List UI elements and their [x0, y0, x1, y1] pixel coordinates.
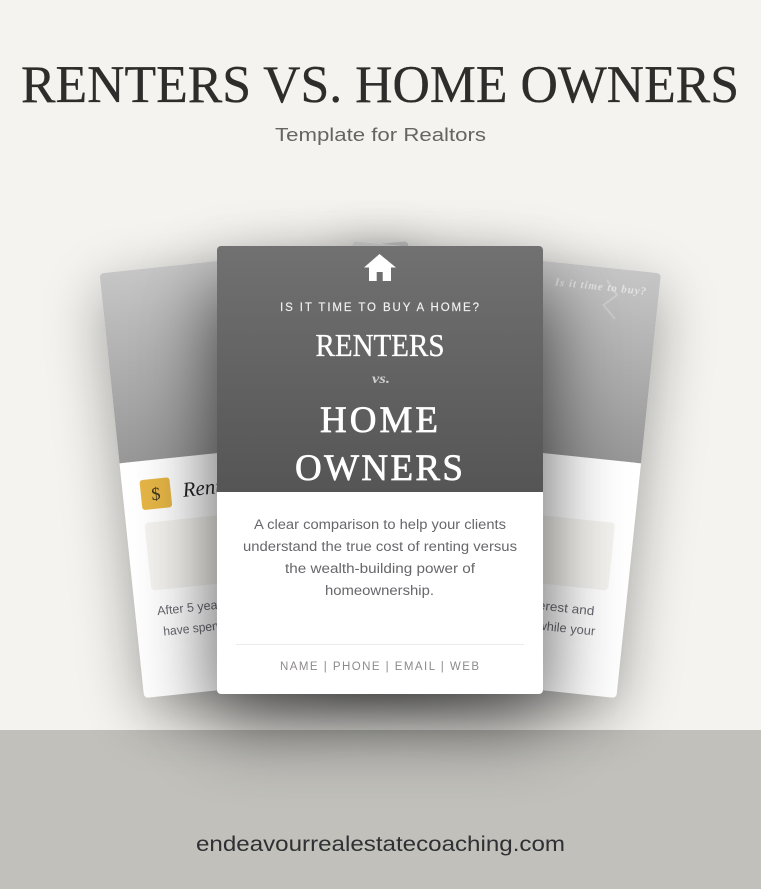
- contact line: NAME | PHONE | EMAIL | WEB: [280, 661, 479, 673]
- description text: A clear comparison to help your clients: [254, 517, 506, 532]
- center card header: [217, 246, 543, 492]
- left card heading: Renters: [180, 471, 248, 502]
- subtitle: Template for Realtors: [275, 124, 486, 145]
- right card header caption: Is it time to buy?: [553, 276, 647, 298]
- icon: dollar badge: $: [150, 483, 161, 504]
- right card text: while your: [536, 618, 596, 638]
- left card text: After 5 years: [156, 597, 229, 618]
- kicker: IS IT TIME TO BUY A HOME?: [280, 302, 479, 314]
- panel: right tilted card: [306, 241, 661, 716]
- heading: home: HOME: [320, 400, 438, 441]
- description text: the wealth-building power of: [285, 561, 475, 576]
- panel: center card: [217, 246, 543, 694]
- icon: dollar badge: [139, 477, 172, 510]
- heading: owners: OWNERS: [295, 448, 463, 489]
- panel: left tilted card: [100, 241, 454, 716]
- right card text: [521, 597, 598, 638]
- footer url: endeavourrealestatecoaching.com: [196, 832, 565, 856]
- icon: house: [364, 254, 396, 281]
- heading: vs: vs.: [372, 372, 390, 387]
- right card header: [333, 241, 661, 463]
- center card shadow: [212, 284, 548, 724]
- right card figure box: [340, 495, 615, 591]
- left card figure box: [144, 495, 420, 591]
- right card text: interest and: [523, 597, 595, 618]
- left card text: have spent: [163, 618, 223, 639]
- heading: renters: RENTERS: [316, 327, 444, 363]
- footer band: [0, 730, 761, 889]
- left card text: [156, 597, 231, 639]
- title: RENTERS VS. HOME OWNERS: [21, 56, 739, 114]
- description text: homeownership.: [325, 583, 434, 598]
- icon: faint chevron on right card: [604, 280, 617, 319]
- description text: understand the true cost of renting versus: [243, 539, 517, 554]
- description text: [243, 517, 517, 598]
- left card header: [100, 241, 428, 463]
